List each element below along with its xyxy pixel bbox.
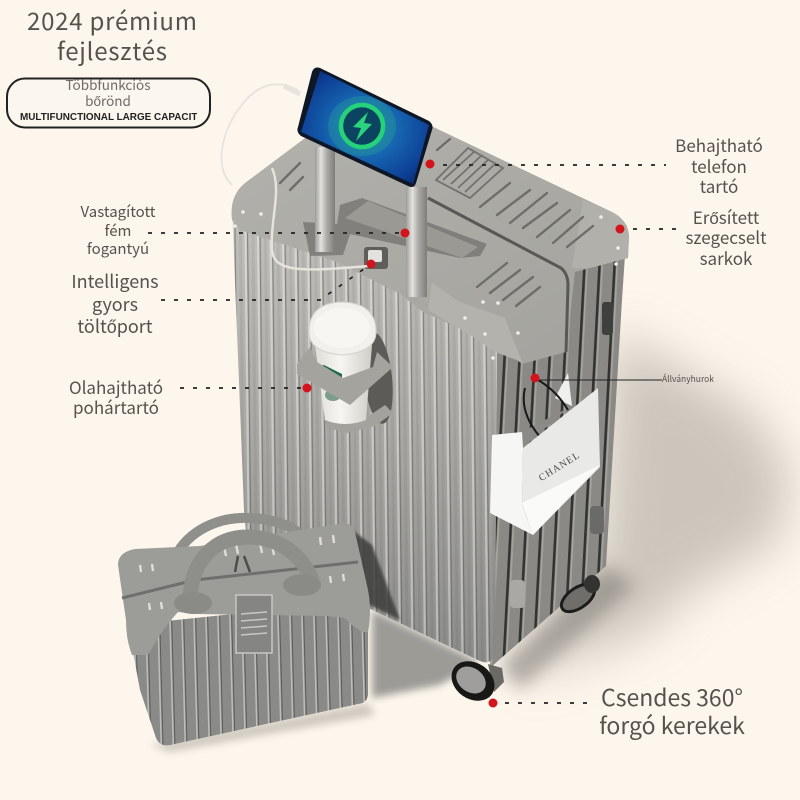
brand: CHANEL <box>537 450 582 484</box>
annotation dots <box>302 160 624 708</box>
label: cup holder: Olahajtható <box>69 374 163 399</box>
lower holder loop <box>323 405 393 433</box>
rivets <box>233 210 620 360</box>
left gusset <box>490 432 533 535</box>
label: wheels <box>599 679 745 741</box>
body front <box>128 600 368 745</box>
holder <box>297 347 393 405</box>
cast shadow <box>150 330 790 752</box>
front panel <box>522 388 600 535</box>
phone on holder <box>297 68 433 187</box>
label: charging port: gyors <box>92 291 138 317</box>
label: metal handle: fogantyú <box>87 238 149 259</box>
side latch top <box>602 302 613 335</box>
label: cup holder: pohártartó <box>73 394 159 419</box>
label: riveted corners <box>685 204 767 270</box>
label: wheels: forgó kerekek <box>599 707 745 741</box>
annotation leader lines <box>148 165 680 703</box>
bottom fold <box>522 465 600 535</box>
title: fejlesztés <box>57 32 167 67</box>
shadow of small case on front face <box>352 530 400 620</box>
carry handle <box>345 201 478 258</box>
interior <box>522 408 568 448</box>
top grid patch <box>436 148 503 198</box>
charging ring <box>328 96 396 156</box>
label: charging port: Intelligens <box>71 268 159 294</box>
handle recess <box>303 198 487 258</box>
body top <box>118 523 370 655</box>
right corner shoulder <box>572 200 629 268</box>
product badge: Többfunkciós <box>65 74 151 94</box>
label: metal handle: Vastagított <box>81 201 156 222</box>
front face ribs <box>232 205 497 662</box>
green sleeve band <box>318 365 342 378</box>
label: phone holder: tartó <box>700 173 738 198</box>
product badge: MULTIFUNCTIONAL LARGE CAPACITY <box>20 111 204 123</box>
front latch lower <box>510 580 525 608</box>
side face with dark ribs <box>490 225 627 668</box>
label: charging port <box>71 268 159 339</box>
label: charging port: töltőport <box>77 313 153 339</box>
label: hook: Állványhurok <box>662 373 714 385</box>
title: 2024 prémium <box>27 2 197 37</box>
label: cup holder <box>69 374 163 419</box>
label: riveted corners: sarkok <box>700 245 753 270</box>
cup holder with coffee cup <box>297 302 397 433</box>
centre plate <box>236 595 272 653</box>
handle mounts <box>174 592 212 614</box>
rear handle <box>175 518 303 557</box>
small ribs <box>140 535 344 610</box>
label: metal handle: fém <box>105 220 131 241</box>
hanging shopping bag <box>490 373 600 535</box>
product badge <box>7 74 210 128</box>
front corner shoulder <box>428 283 522 362</box>
lower logo <box>325 389 341 401</box>
large silver suitcase <box>232 94 629 668</box>
frame seam <box>428 198 568 352</box>
rear wheels <box>557 575 600 617</box>
small vanity case <box>118 518 370 745</box>
top ribs <box>280 139 593 306</box>
usb port <box>364 247 388 269</box>
cup lid <box>309 302 376 355</box>
front handle <box>190 537 312 598</box>
label: phone holder: telefon <box>691 153 747 178</box>
title <box>27 2 197 67</box>
front face gradient <box>232 205 497 662</box>
lid seam <box>122 562 358 598</box>
zipper pulls <box>235 556 250 572</box>
side latch lower <box>590 506 604 534</box>
front wheel <box>444 653 504 709</box>
label: riveted corners: szegecselt <box>685 224 767 249</box>
cup body <box>315 345 372 424</box>
label: riveted corners: Erősített <box>693 204 760 229</box>
back spike <box>555 373 572 406</box>
charging cable <box>222 84 368 269</box>
label: phone holder: Behajtható <box>675 132 763 157</box>
top face <box>232 94 629 364</box>
label: phone holder <box>675 132 763 198</box>
recess <box>359 331 397 425</box>
label: wheels: Csendes 360° <box>601 679 743 713</box>
telescopic handle poles <box>315 147 427 297</box>
label: metal handle <box>81 201 156 259</box>
wheels <box>444 575 600 709</box>
product badge: bőrönd <box>85 90 131 110</box>
handles <box>524 380 568 437</box>
